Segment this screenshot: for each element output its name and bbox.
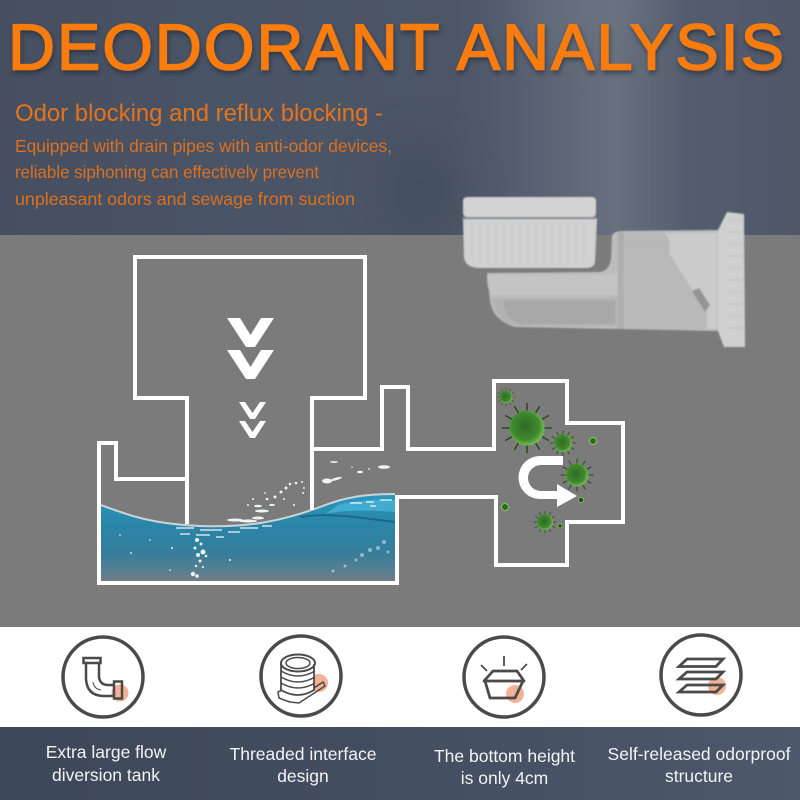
flange <box>718 212 745 347</box>
downward chevrons: small <box>239 402 266 438</box>
caption: bottom height <box>434 746 575 788</box>
description text <box>15 136 392 209</box>
description text: Equipped with drain pipes with anti-odor devices, <box>15 136 392 156</box>
caption: threaded interface design: design <box>277 766 329 786</box>
caption: self-released odorproof structure <box>608 744 791 786</box>
caption: extra large flow diversion tank: Extra large flow <box>46 742 167 762</box>
caption: extra large flow diversion tank: diversion tank <box>52 765 160 785</box>
icon strip background <box>0 627 800 727</box>
u-turn arrow <box>518 456 577 507</box>
icon: stacked plates <box>661 635 741 715</box>
subheading: Odor blocking and reflux blocking - <box>15 100 383 127</box>
pipe outline: inlet, trap and outlet channel <box>99 257 623 583</box>
caption: self-released odorproof structure: structure <box>665 766 733 786</box>
icon: low-height box <box>464 637 544 717</box>
water in tank <box>101 461 395 581</box>
caption: bottom height: is only 4cm <box>461 768 548 788</box>
caption: self-released odorproof structure: Self-released odorproof <box>608 744 791 764</box>
trap body <box>487 230 718 331</box>
caption: extra large flow diversion tank <box>46 742 167 785</box>
title: DEODORANT ANALYSIS <box>8 10 784 84</box>
description text: reliable siphoning can effectively prevent <box>15 162 319 182</box>
downward chevrons: large <box>227 318 274 379</box>
top background panel <box>0 0 800 240</box>
product photo: drain trap <box>462 197 745 347</box>
icon: threaded interface <box>261 636 341 716</box>
bubbles and splash <box>119 461 392 578</box>
caption strip background <box>0 727 800 800</box>
icon: elbow pipe <box>63 637 143 717</box>
screw cap <box>463 197 596 217</box>
caption: bottom height: The bottom height <box>434 746 575 766</box>
caption: threaded interface design: Threaded interface <box>230 744 376 764</box>
bacteria cluster <box>497 388 596 533</box>
diagram background panel <box>0 235 800 627</box>
description text: unpleasant odors and sewage from suction <box>15 189 355 209</box>
caption: threaded interface design <box>230 744 376 786</box>
